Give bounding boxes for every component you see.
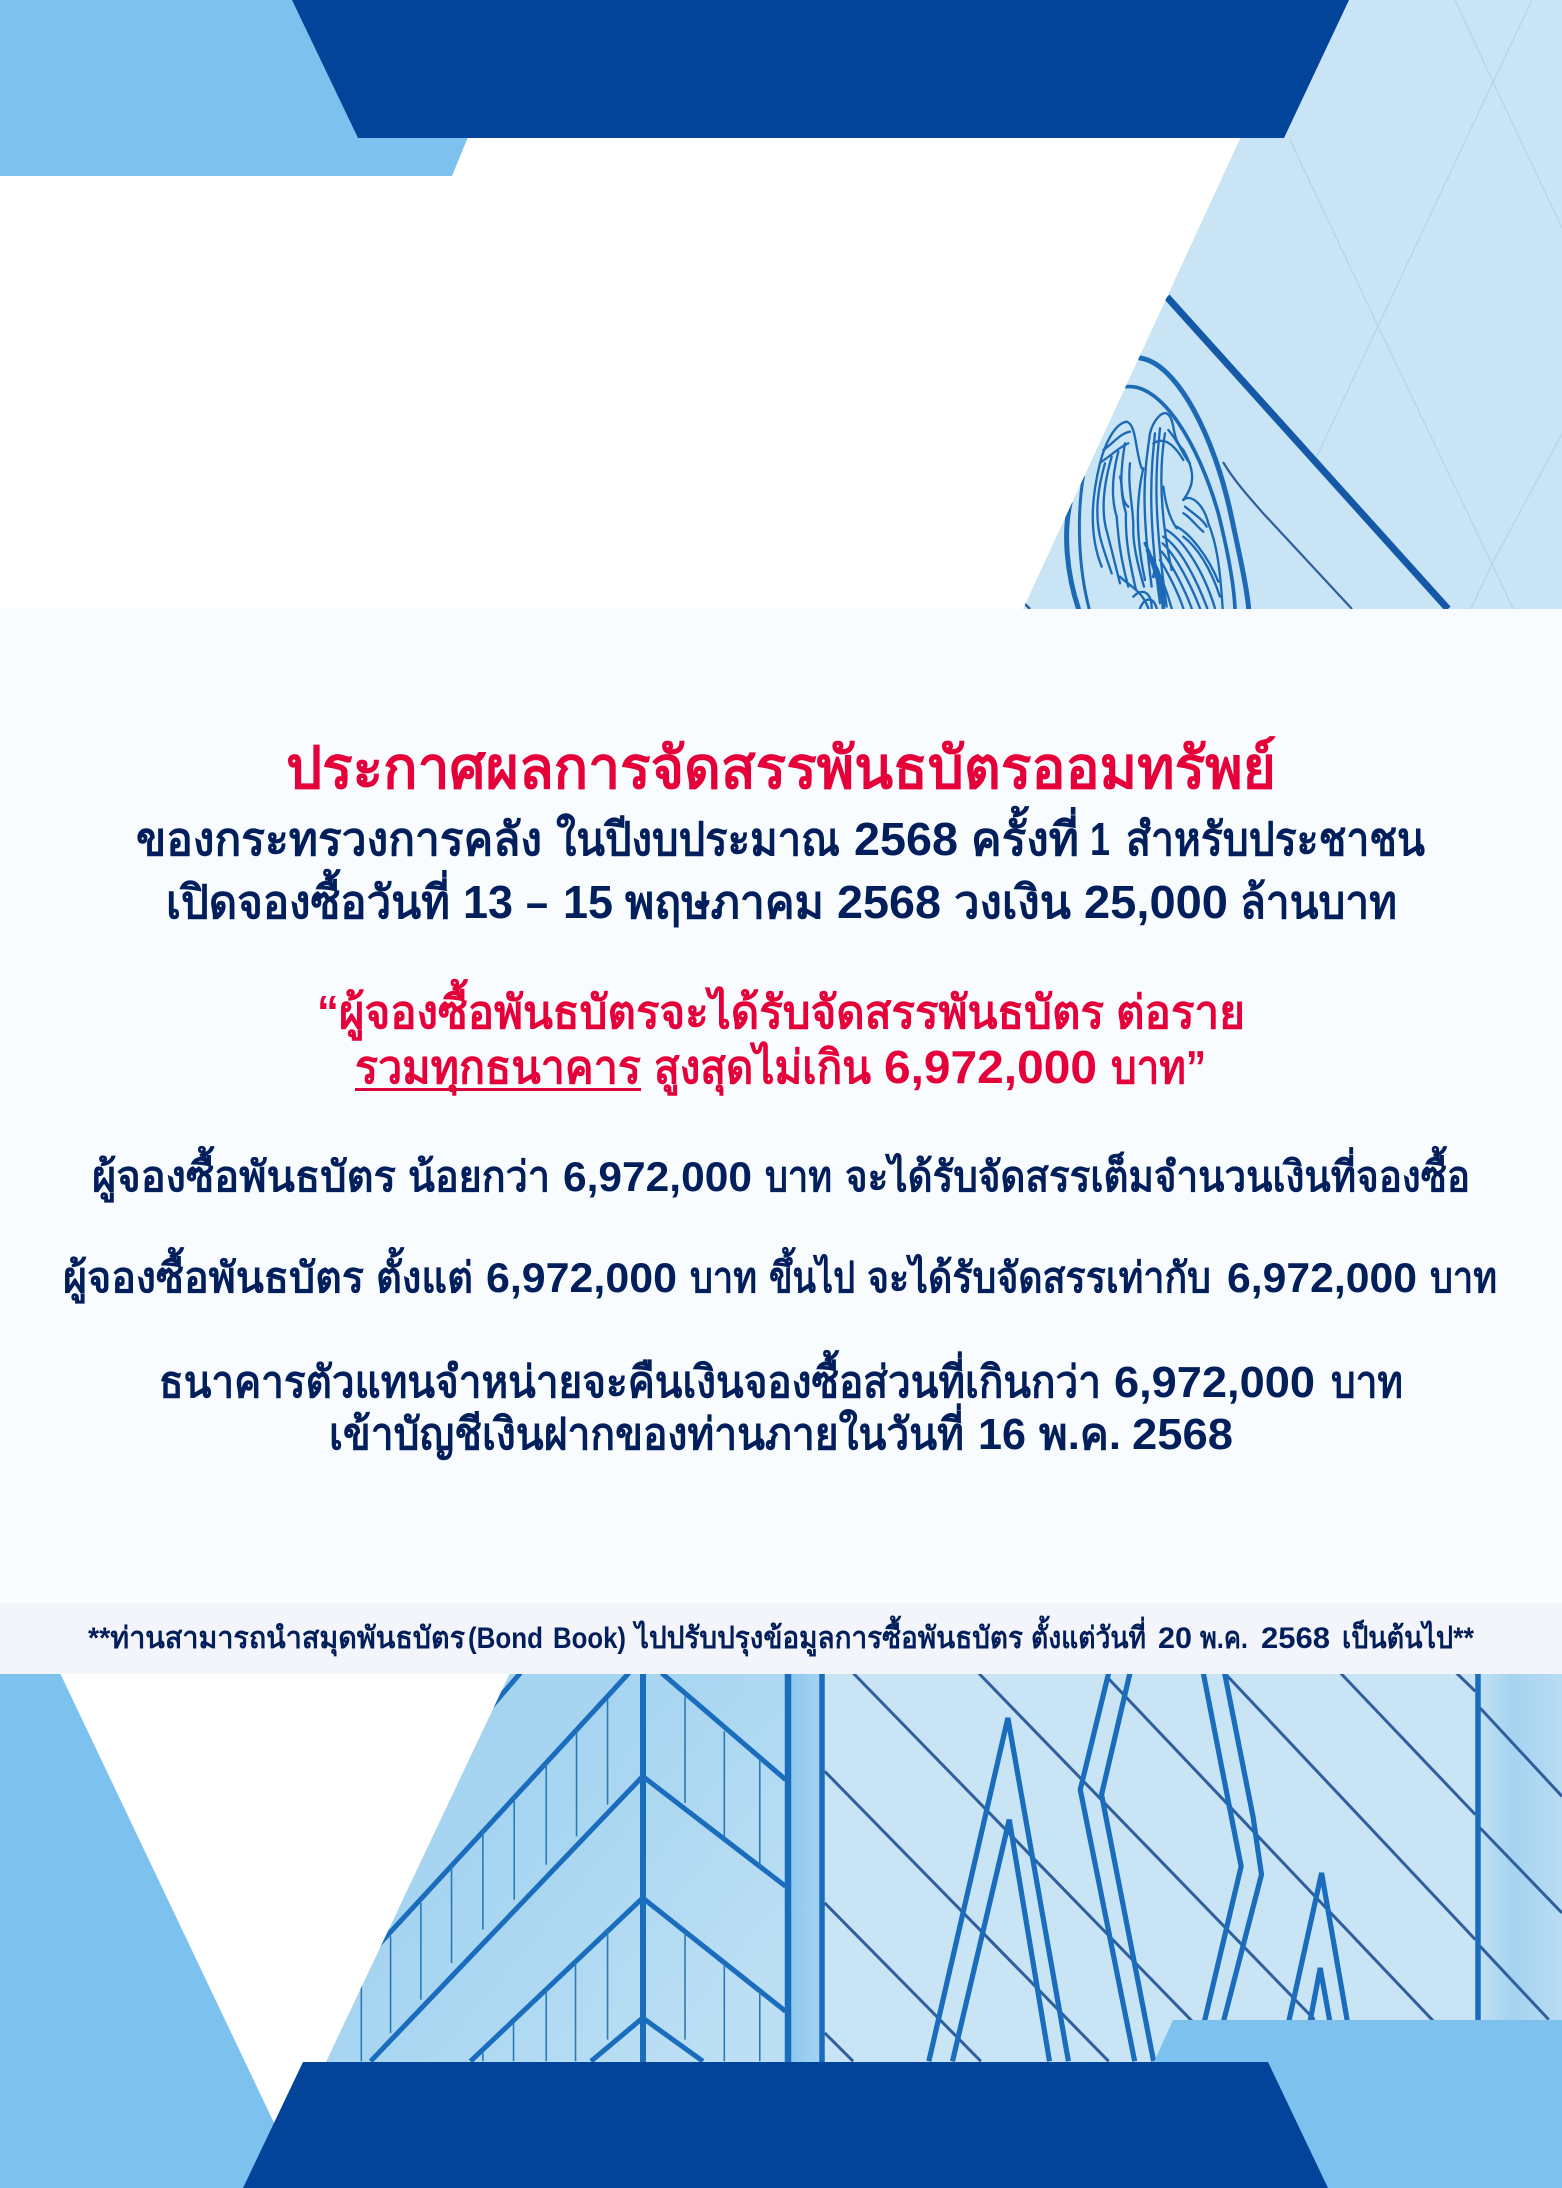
callout: allocation limit bbox=[317, 978, 1245, 1096]
panel: left light blue wedge bbox=[0, 1673, 305, 2188]
footnote bbox=[88, 1615, 1474, 1657]
footnote: พ.ค. bbox=[1200, 1622, 1248, 1655]
text: below limit bbox=[92, 1145, 1470, 1203]
title: ประกาศผลการจัดสรรพันธบัตรออมทรัพย์ bbox=[286, 735, 1276, 801]
text: refund bbox=[159, 1349, 1403, 1460]
text: refund: 6,972,000 bbox=[1114, 1358, 1315, 1407]
text: below limit: บาท bbox=[765, 1153, 832, 1200]
thin diagonal beam bbox=[1223, 462, 1352, 609]
callout: allocation limit: สูงสุดไม่เกิน bbox=[654, 1041, 872, 1096]
footnote: **ท่านสามารถนำสมุดพันธบัตร bbox=[88, 1622, 465, 1657]
subtitle: ของกระทรวงการคลัง bbox=[136, 813, 542, 865]
text: at or above limit: จะได้รับจัดสรรเท่ากับ bbox=[867, 1253, 1211, 1301]
subtitle: พฤษภาคม bbox=[625, 876, 824, 928]
footnote: (Bond bbox=[468, 1622, 543, 1655]
text: at or above limit: 6,972,000 bbox=[486, 1254, 677, 1301]
callout: allocation limit: รวมทุกธนาคาร bbox=[355, 1041, 641, 1096]
text: refund: 16 bbox=[978, 1410, 1026, 1459]
panel: pale blue building face bbox=[1023, 0, 1562, 609]
panel: left building face bbox=[326, 1673, 788, 2062]
subtitle: ล้านบาท bbox=[1240, 876, 1397, 928]
header graphic: glass building with Bank of Thailand emblem bbox=[0, 0, 1562, 617]
text: below limit: น้อยกว่า bbox=[408, 1153, 550, 1200]
subtitle: – bbox=[526, 876, 548, 928]
text: refund: ธนาคารตัวแทนจำหน่ายจะคืนเงินจองซื้อส่วนที่เกินกว่า bbox=[159, 1349, 1101, 1407]
callout: allocation limit: ต่อราย bbox=[1116, 986, 1245, 1038]
panel: dark blue header bar bbox=[292, 0, 1349, 138]
text: at or above limit: ตั้งแต่ bbox=[376, 1246, 473, 1301]
subtitle: 13 bbox=[463, 876, 513, 928]
footnote: ตั้งแต่วันที่ bbox=[1031, 1615, 1146, 1655]
footnote: 2568 bbox=[1261, 1622, 1330, 1655]
text: refund: เข้าบัญชีเงินฝากของท่านภายในวันที่ bbox=[329, 1403, 964, 1460]
text: below limit: 6,972,000 bbox=[563, 1153, 752, 1200]
subtitle: 2568 bbox=[837, 876, 941, 928]
text: at or above limit bbox=[63, 1246, 1497, 1304]
subtitle: วงเงิน bbox=[954, 876, 1072, 928]
footnote: 20 bbox=[1158, 1622, 1192, 1655]
subtitle: 1 bbox=[1090, 813, 1110, 865]
footnote: Book) bbox=[553, 1622, 626, 1655]
vertical mullions bbox=[643, 1673, 1478, 2062]
text: refund: พ.ค. bbox=[1039, 1410, 1121, 1459]
text: at or above limit: บาท bbox=[690, 1254, 757, 1301]
subtitle: 25,000 bbox=[1084, 876, 1228, 928]
icon: circular emblem with bird bbox=[1023, 297, 1448, 609]
faint lattice lines bbox=[1290, 0, 1562, 617]
left building line work bbox=[361, 1673, 786, 2061]
panel: right light blue block bbox=[1154, 2020, 1562, 2188]
subtitle: เปิดจองซื้อวันที่ bbox=[166, 868, 450, 928]
thick diagonal beam bbox=[1167, 297, 1448, 609]
callout: allocation limit: “ผู้จองซื้อพันธบัตรจะได้รับจัดสรรพันธบัตร bbox=[317, 978, 1104, 1041]
subtitle: 2568 bbox=[854, 813, 958, 865]
panel: light blue corner block bbox=[0, 0, 468, 176]
text: below limit: จะได้รับจัดสรรเต็มจำนวนเงินที่จองซื้อ bbox=[845, 1145, 1470, 1200]
text: below limit: ผู้จองซื้อพันธบัตร bbox=[92, 1145, 396, 1203]
panel: main content background bbox=[0, 609, 1562, 1603]
subtitle: ครั้งที่ bbox=[971, 805, 1079, 865]
subtitle: ในปีงบประมาณ bbox=[556, 812, 840, 865]
text: at or above limit: บาท bbox=[1430, 1254, 1497, 1301]
panel: dark blue footer bar bbox=[243, 2062, 1335, 2188]
callout: allocation limit: บาท” bbox=[1111, 1041, 1206, 1093]
footer graphic: glass buildings bbox=[0, 1673, 1562, 2188]
text: refund: 2568 bbox=[1132, 1410, 1233, 1459]
right glass line work bbox=[825, 1673, 1562, 2061]
subtitle: สำหรับประชาชน bbox=[1126, 813, 1425, 865]
panel: right glass face bbox=[822, 1673, 1478, 2062]
panel: footnote band bbox=[0, 1603, 1562, 1674]
footnote: เป็นต้นไป** bbox=[1342, 1619, 1474, 1655]
text: refund: บาท bbox=[1331, 1358, 1403, 1407]
text: at or above limit: ขึ้นไป bbox=[769, 1246, 855, 1301]
text: at or above limit: ผู้จองซื้อพันธบัตร bbox=[63, 1246, 364, 1304]
subtitle bbox=[136, 805, 1425, 928]
panel: centre strip bbox=[788, 1673, 822, 2062]
text: at or above limit: 6,972,000 bbox=[1227, 1254, 1417, 1301]
callout: allocation limit: 6,972,000 bbox=[884, 1041, 1097, 1093]
footnote: ไปปรับปรุงข้อมูลการซื้อพันธบัตร bbox=[632, 1615, 1023, 1657]
subtitle: 15 bbox=[563, 876, 613, 928]
panel: far right face bbox=[1478, 1673, 1562, 2062]
